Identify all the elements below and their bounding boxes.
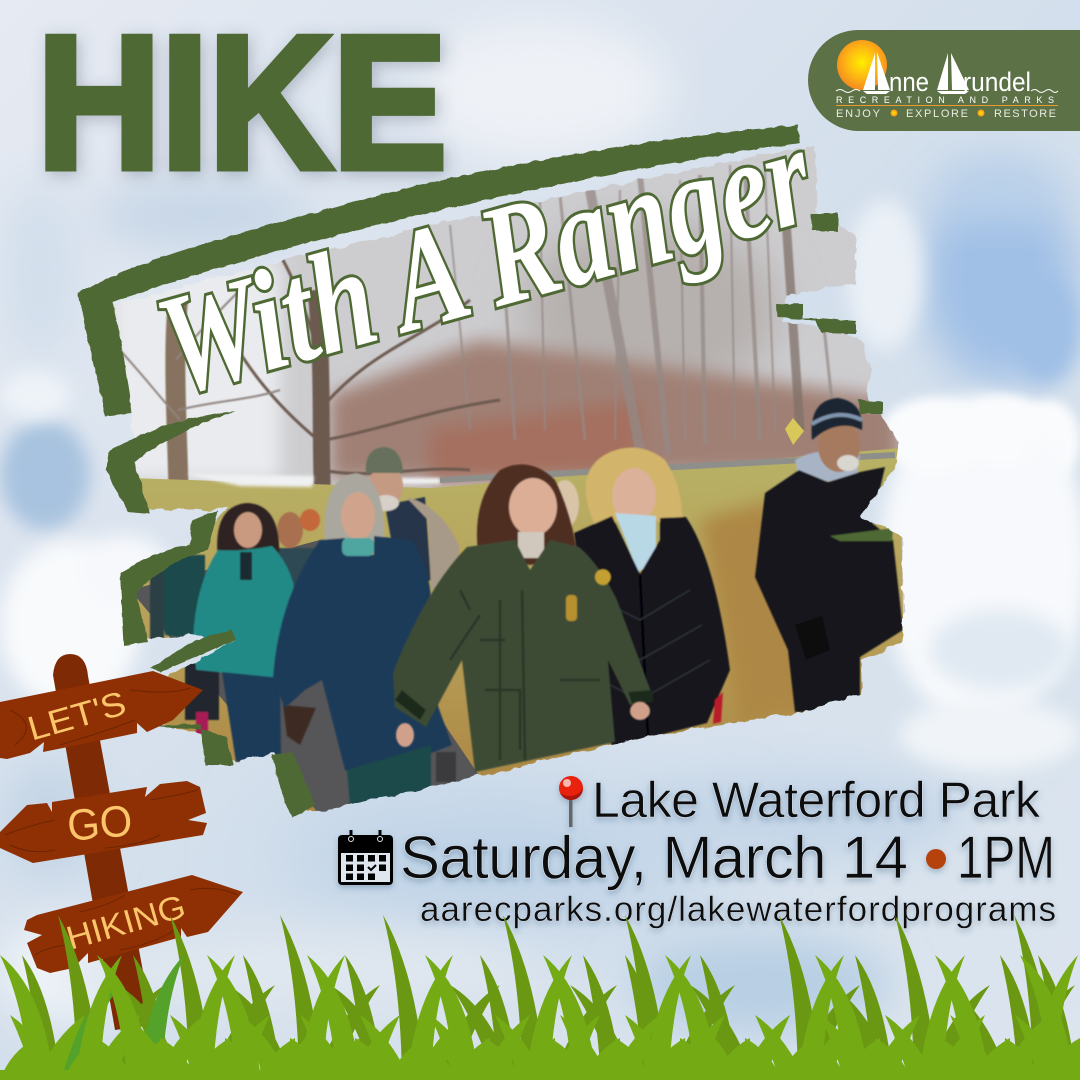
photo: hikers walking with ranger: [100, 140, 920, 830]
bullet separator: [926, 849, 946, 869]
icon: calendar: [338, 830, 393, 885]
time text: 1PM: [957, 824, 1055, 891]
logo tagline: [836, 108, 1058, 120]
location text: Lake Waterford Park: [592, 772, 1041, 828]
green brush frame strokes: [78, 125, 883, 818]
logo: Anne Arundel Recreation and Parks: [808, 30, 1080, 131]
photo: ranger in olive jacket: [393, 464, 653, 772]
logo tagline: RESTORE: [994, 108, 1058, 120]
event details: [338, 772, 1056, 929]
signpost: board GO: GO: [65, 796, 134, 851]
signpost: post: [53, 654, 153, 1030]
photo: woman in navy parka: [273, 473, 456, 805]
photo: background hikers: [150, 509, 320, 736]
signpost: board LET'S: LET'S: [24, 684, 130, 748]
title: HIKE: HIKE: [37, 0, 447, 209]
photo: man in army cap: [366, 447, 459, 590]
logo sailboats: [863, 52, 969, 94]
heading: With A Ranger script: With A Ranger: [142, 95, 830, 427]
logo wordmark: nne: [889, 67, 929, 97]
signpost: board LET'S: [0, 671, 203, 759]
logo background pill: [808, 30, 1080, 131]
signpost: [0, 654, 243, 1030]
photo: bare trees: [122, 259, 501, 485]
logo sun: [837, 40, 887, 90]
photo: grass field and snow: [130, 418, 905, 820]
photo: man in black coat and beanie: [755, 398, 903, 712]
logo water lines: [836, 90, 1058, 92]
grass: front blades: [0, 955, 1080, 1080]
photo: small woman behind ranger: [556, 479, 580, 526]
signpost: board GO: [0, 781, 207, 863]
grass: back blades: [22, 915, 1076, 1080]
logo wordmark: rundel: [963, 67, 1031, 97]
logo tagline: EXPLORE: [906, 108, 970, 120]
icon: red map pin: [559, 776, 583, 827]
photo: blonde woman in black puffer: [574, 448, 730, 747]
photo: woman in teal coat: [193, 503, 316, 762]
date text: Saturday, March 14: [400, 824, 908, 891]
logo tagline: ENJOY: [836, 108, 882, 120]
logo wordmark: [836, 67, 1058, 105]
grass foreground: [0, 915, 1080, 1080]
website url: aarecparks.org/lakewaterfordprograms: [420, 890, 1056, 929]
signpost: board HIKING: [24, 875, 243, 973]
logo wordmark: RECREATION AND PARKS: [836, 95, 1058, 105]
signpost: board HIKING: HIKING: [62, 887, 190, 957]
photo: misty forest backdrop: [114, 146, 906, 636]
